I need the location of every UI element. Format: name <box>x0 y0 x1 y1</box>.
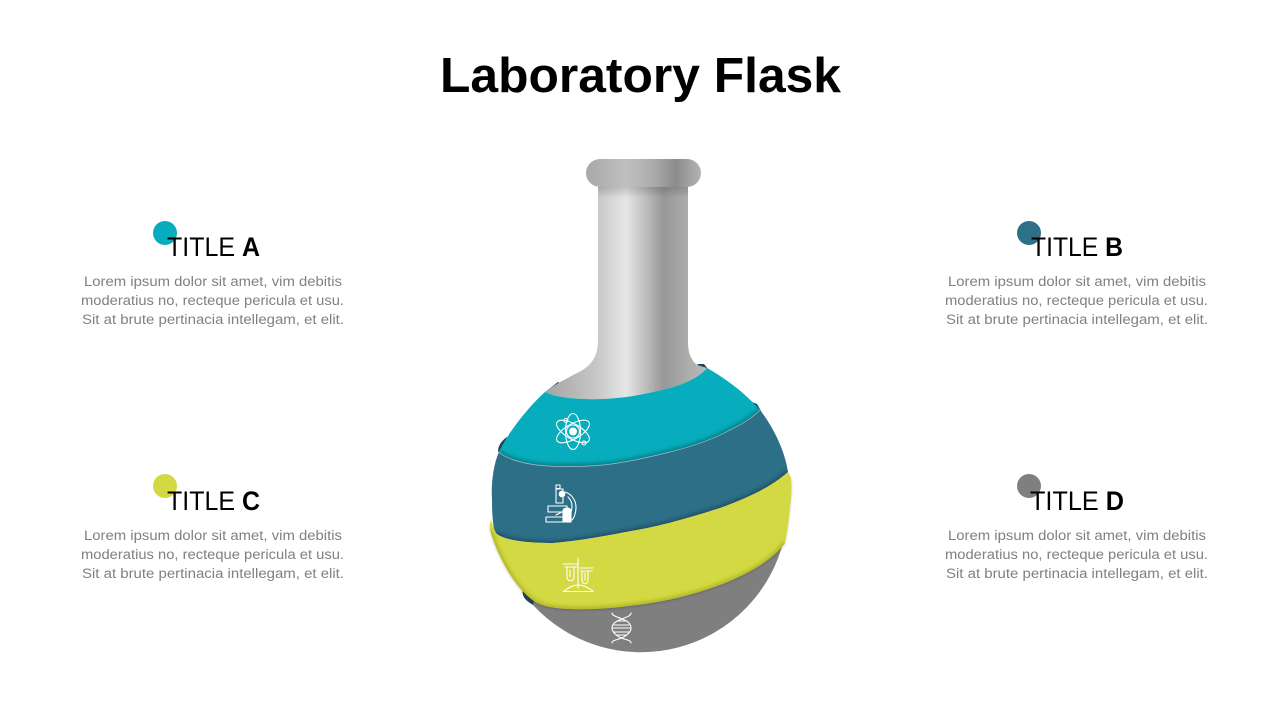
text block: D: moderatius no, recteque pericula et usu. <box>945 547 1208 562</box>
dark inner edges <box>498 364 761 605</box>
flask lip <box>586 159 701 187</box>
heading: D: TITLE D <box>1030 486 1124 516</box>
flask illustration <box>485 159 795 652</box>
icon: test tubes on stand <box>563 558 593 592</box>
marker: D <box>1017 474 1041 498</box>
panel: title B <box>945 221 1208 327</box>
text block: A: moderatius no, recteque pericula et usu. <box>81 293 344 308</box>
text block: D: Sit at brute pertinacia intellegam, et elit. <box>946 566 1208 581</box>
marker: B <box>1017 221 1041 245</box>
band edge highlight <box>499 410 760 466</box>
band: teal A <box>499 368 760 466</box>
text block: D: Lorem ipsum dolor sit amet, vim debitis <box>948 528 1206 543</box>
text block: D <box>945 528 1208 581</box>
band: gray D <box>533 530 784 652</box>
panel: title D <box>945 474 1208 581</box>
text block: C: Sit at brute pertinacia intellegam, et elit. <box>82 566 344 581</box>
icon: atom <box>553 414 593 450</box>
heading: B: TITLE B <box>1031 232 1123 262</box>
text block: B: moderatius no, recteque pericula et usu. <box>945 293 1208 308</box>
marker: C <box>153 474 177 498</box>
text block: C <box>81 528 344 581</box>
text block: B <box>945 274 1208 327</box>
text block: A <box>81 274 344 327</box>
panel: title A <box>81 221 344 327</box>
title: Laboratory Flask <box>440 49 842 103</box>
text block: C: Lorem ipsum dolor sit amet, vim debitis <box>84 528 342 543</box>
icon: DNA helix <box>612 613 631 643</box>
marker: A <box>153 221 177 245</box>
text block: A: Lorem ipsum dolor sit amet, vim debitis <box>84 274 342 289</box>
panel: title C <box>81 474 344 581</box>
heading: C: TITLE C <box>167 486 260 516</box>
band: yellow C <box>485 465 795 615</box>
band: blue B <box>492 410 788 543</box>
text block: B: Sit at brute pertinacia intellegam, et elit. <box>946 312 1208 327</box>
icon: microscope <box>546 485 576 522</box>
flask neck <box>545 180 707 399</box>
text block: B: Lorem ipsum dolor sit amet, vim debitis <box>948 274 1206 289</box>
text block: C: moderatius no, recteque pericula et usu. <box>81 547 344 562</box>
heading: A: TITLE A <box>167 232 260 262</box>
text block: A: Sit at brute pertinacia intellegam, et elit. <box>82 312 344 327</box>
